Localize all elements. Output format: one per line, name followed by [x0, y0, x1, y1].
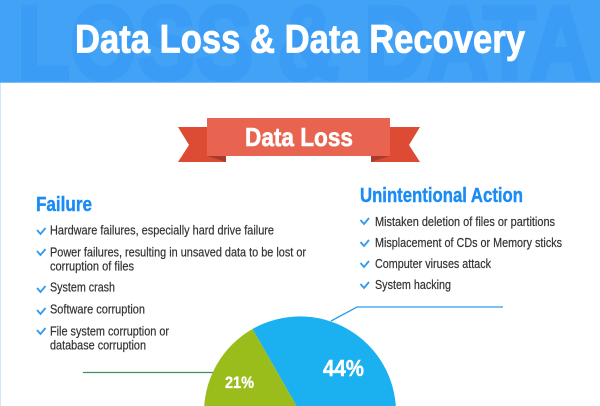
panel: failure [36, 194, 307, 352]
leader line: unintentional action [331, 307, 503, 321]
pie chart [204, 316, 396, 406]
title: Data Loss & Data Recovery [75, 18, 526, 62]
list: failure causes: corruption of files [50, 258, 134, 274]
label: 44%: 44% [323, 355, 364, 381]
list: failure causes: Hardware failures, especially hard drive failure [50, 222, 274, 238]
heading: Unintentional Action: Unintentional Action [360, 185, 523, 207]
list: unintentional actions [375, 214, 562, 292]
heading: Failure: Failure [36, 194, 92, 216]
leader line: failure [83, 372, 214, 374]
slice: 44% [252, 316, 396, 406]
list: unintentional actions: Computer viruses attack [375, 256, 491, 271]
list: failure causes: database corruption [50, 338, 146, 352]
list: failure causes: Software corruption [50, 302, 145, 316]
list: failure causes [50, 222, 307, 352]
list: unintentional actions: Mistaken deletion of files or partitions [375, 214, 555, 229]
list: unintentional actions: Misplacement of CDs or Memory sticks [375, 235, 562, 250]
ribbon heading: Data Loss [178, 118, 420, 162]
list: failure causes: System crash [50, 280, 115, 294]
list: failure causes: File system corruption or [50, 324, 170, 338]
slice: 21% [204, 329, 300, 406]
label: 21%: 21% [225, 373, 254, 392]
list: failure causes: Power failures, resulting in unsaved data to be lost or [50, 244, 307, 260]
icons: unintentional action check marks [360, 218, 369, 288]
list: unintentional actions: System hacking [375, 277, 451, 292]
panel: unintentional action [360, 185, 562, 292]
icons: failure check marks [37, 228, 46, 334]
ribbon heading: Data Loss: Data Loss [245, 122, 353, 152]
